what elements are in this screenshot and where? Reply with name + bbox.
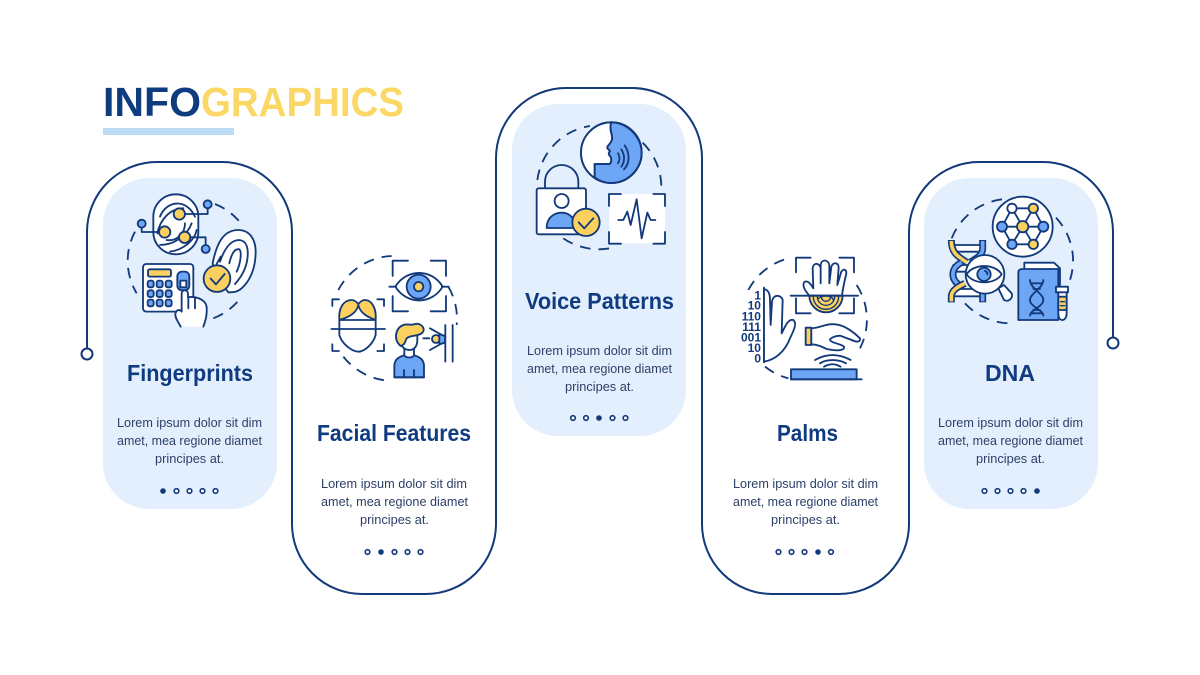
icon: palms: 001: [741, 331, 761, 345]
text: dna: Lorem ipsum dolor sit dim: [938, 416, 1083, 430]
heading: voice patterns: Voice Patterns: [525, 288, 674, 314]
text: facial features: Lorem ipsum dolor sit dim: [321, 477, 467, 491]
text: facial features: [321, 477, 469, 527]
heading: fingerprints: Fingerprints: [127, 360, 253, 386]
pagination dots: [982, 488, 1040, 494]
text: voice patterns: principes at.: [565, 380, 634, 394]
panel: facial features: [317, 256, 471, 555]
text: facial features: amet, mea regione diamet: [321, 495, 469, 509]
text: fingerprints: principes at.: [155, 452, 224, 466]
icon: palms: 10: [748, 299, 761, 313]
text: voice patterns: [527, 344, 673, 394]
icon: palms: [741, 258, 867, 379]
text: facial features: principes at.: [360, 513, 429, 527]
icon: palms: 10: [748, 341, 761, 355]
heading: palms: Palms: [777, 420, 838, 446]
panel: dna: [924, 178, 1098, 509]
pagination dots: [571, 415, 628, 421]
pagination dots: [365, 549, 423, 555]
panel: voice patterns: [512, 104, 686, 436]
text: palms: [733, 477, 879, 527]
icon: fingerprints: [128, 194, 256, 327]
icon: palms: 111: [742, 320, 761, 334]
icon: palms: 110: [742, 309, 761, 323]
text: dna: [938, 416, 1084, 466]
text: voice patterns: Lorem ipsum dolor sit dim: [527, 344, 672, 358]
text: dna: amet, mea regione diamet: [938, 434, 1084, 448]
text: palms: amet, mea regione diamet: [733, 495, 879, 509]
connecting outline: [82, 88, 1118, 594]
title: [103, 79, 404, 135]
heading: dna: DNA: [985, 360, 1035, 386]
text: fingerprints: amet, mea regione diamet: [117, 434, 263, 448]
text: palms: principes at.: [771, 513, 840, 527]
text: voice patterns: amet, mea regione diamet: [527, 362, 673, 376]
panel: fingerprints: [103, 178, 277, 509]
icon: palms: 1: [754, 288, 761, 302]
pagination dots: [160, 488, 218, 494]
title: GRAPHICS: [201, 79, 404, 125]
title: INFO: [103, 79, 201, 125]
pagination dots: [776, 549, 833, 555]
icon: palms: 0: [754, 351, 761, 365]
text: fingerprints: [117, 416, 263, 466]
panel: palms: [733, 258, 879, 555]
heading: facial features: Facial Features: [317, 420, 471, 446]
icon: dna: [951, 197, 1073, 323]
text: dna: principes at.: [976, 452, 1045, 466]
icon: voice patterns: [537, 122, 665, 249]
icon: facial features: [331, 256, 457, 381]
text: palms: Lorem ipsum dolor sit dim: [733, 477, 878, 491]
text: fingerprints: Lorem ipsum dolor sit dim: [117, 416, 262, 430]
